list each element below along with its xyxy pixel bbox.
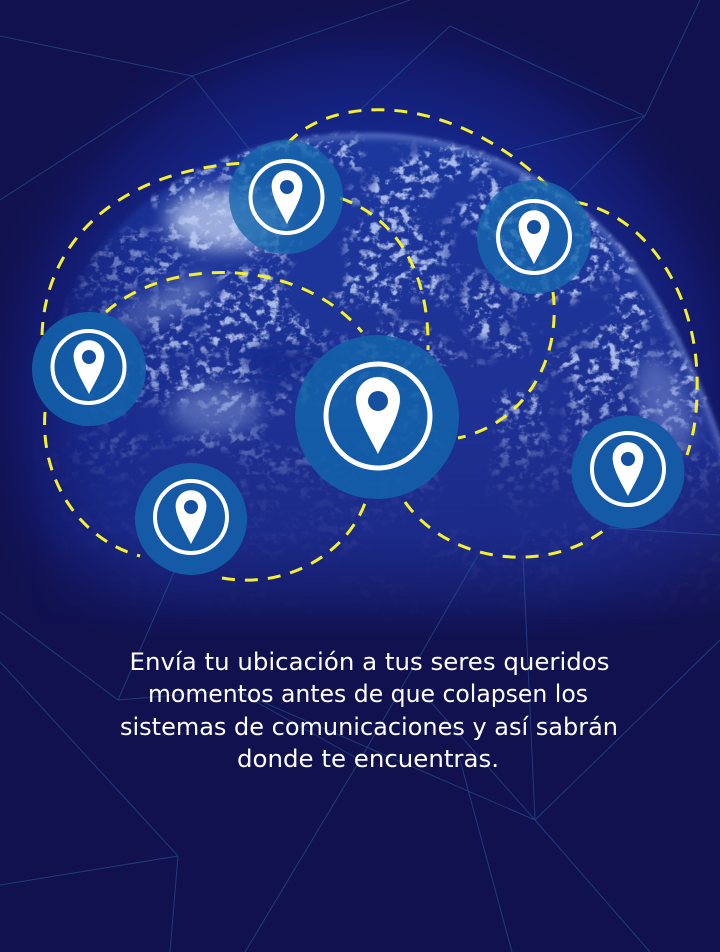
location marker: bottom left [135,463,247,575]
caption text [120,648,618,773]
location marker: top centre [229,140,343,254]
dashed coverage circles [42,110,697,580]
location marker: centre, large [295,335,459,499]
cloud masses [165,190,285,250]
caption text: momentos antes de que colapsen los [148,680,588,708]
location marker: top right [477,180,591,294]
dark sea patches [245,344,335,380]
location marker: left [32,312,146,426]
caption text: Envía tu ubicación a tus seres queridos [130,648,610,676]
globe [54,130,720,602]
caption text: donde te encuentras. [237,745,499,773]
atmosphere limb [240,131,720,461]
location marker: right [572,416,684,528]
caption text: sistemas de comunicaciones y así sabrán [120,713,618,741]
